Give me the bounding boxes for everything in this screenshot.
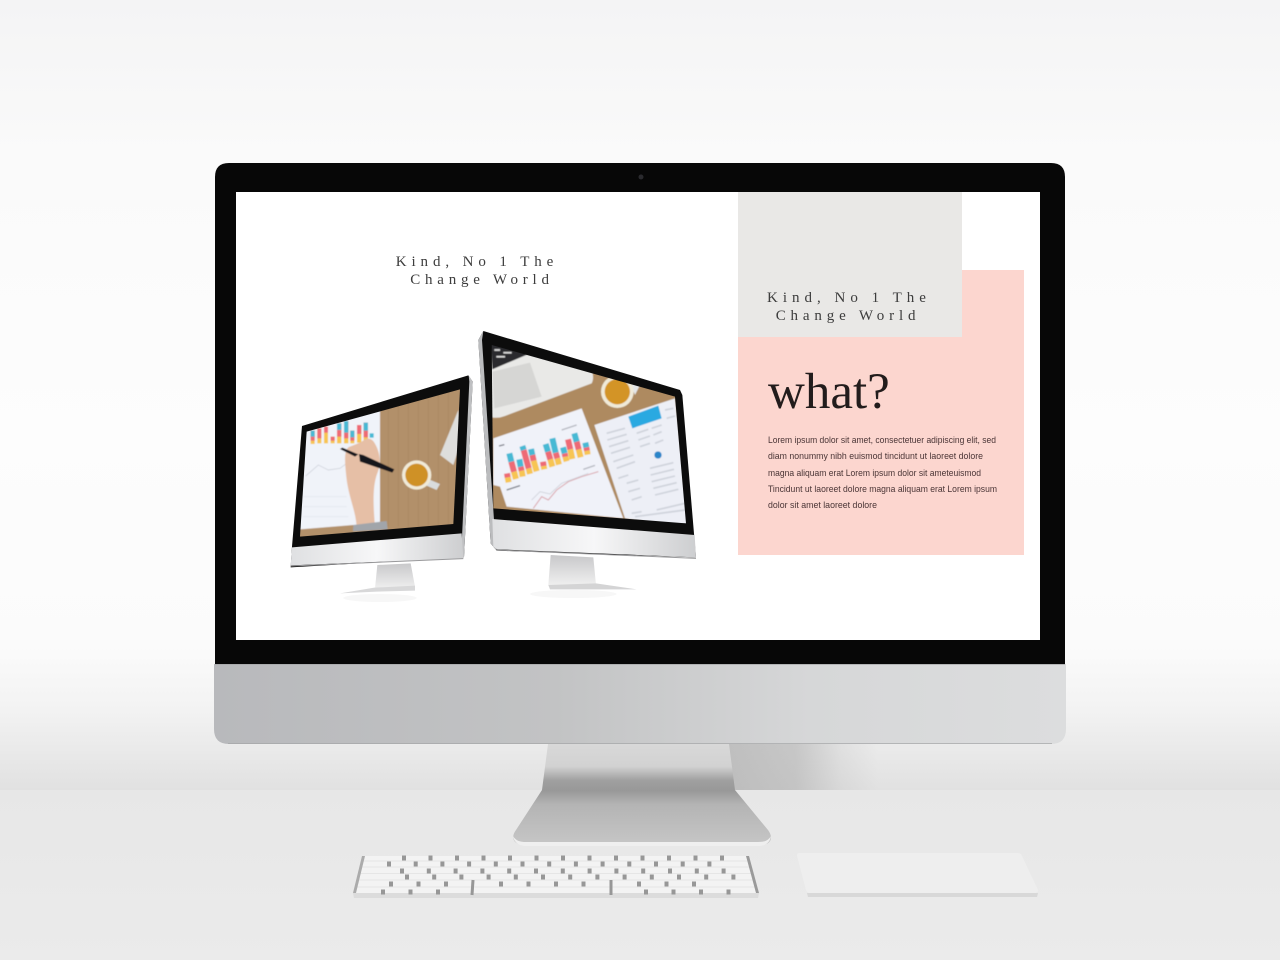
trackpad xyxy=(797,853,1038,897)
chart labels xyxy=(499,445,520,490)
heading: right slide title xyxy=(767,290,931,324)
coffee cup xyxy=(631,384,640,396)
body text: Lorem ipsum dolor sit amet, consectetuer adipiscing elit, sed xyxy=(768,435,996,446)
heading: right slide title: Change World xyxy=(776,308,920,324)
large monitor body xyxy=(478,331,696,557)
small monitor stand xyxy=(375,563,415,588)
webcam xyxy=(638,174,644,180)
line chart xyxy=(533,472,598,508)
panel: pink block xyxy=(738,270,1024,555)
body text: magna aliquam erat Lorem ipsum dolor sit ameteuismod xyxy=(768,468,981,479)
keyboard key marks xyxy=(381,858,736,895)
screen xyxy=(236,192,1040,640)
coffee cup xyxy=(402,460,440,490)
report text lines xyxy=(607,408,685,517)
monitor stand xyxy=(513,744,771,845)
body text: dolor sit amet laoreet dolore xyxy=(768,500,877,511)
laptop xyxy=(492,351,594,418)
monitor chin xyxy=(214,664,1066,744)
keyboard side edges xyxy=(353,856,365,893)
panel: gray block xyxy=(738,192,962,337)
chin edges xyxy=(215,664,1065,744)
large monitor screen photo xyxy=(492,345,686,524)
body text: Tincidunt ut laoreet dolore magna aliquam erat Lorem ipsum xyxy=(768,484,997,495)
monitor frame xyxy=(215,163,1065,664)
laptop keyboard xyxy=(492,345,528,370)
chart paper xyxy=(493,408,623,518)
small monitor body xyxy=(291,375,473,567)
body text xyxy=(768,435,997,511)
small monitor screen photo xyxy=(300,390,460,537)
key row gaps xyxy=(355,861,757,887)
hand and pen xyxy=(340,439,394,531)
heading: right slide title: Kind, No 1 The xyxy=(767,290,931,306)
large monitor chin xyxy=(492,519,696,557)
illustration: left small monitor xyxy=(290,375,473,594)
report header xyxy=(628,406,662,428)
illustration: right large monitor xyxy=(478,331,696,598)
heading: what?: what? xyxy=(768,364,890,420)
desktop computer xyxy=(214,163,1066,846)
report badge xyxy=(654,451,662,459)
heading: left slide title: Kind, No 1 The xyxy=(396,254,558,270)
large chart bars xyxy=(507,433,588,482)
heading: left slide title: Change World xyxy=(410,272,554,288)
stand base edge xyxy=(513,836,771,846)
small monitor reflection xyxy=(343,594,417,602)
report paper xyxy=(594,398,688,527)
keyboard xyxy=(353,856,759,898)
large monitor reflection xyxy=(530,590,617,598)
small chart bars xyxy=(311,421,374,444)
large monitor stand xyxy=(548,555,596,585)
small monitor chin xyxy=(291,533,463,565)
body text: diam nonummy nibh euismod tincidunt ut laoreet dolore xyxy=(768,451,983,462)
large monitor left edge xyxy=(478,331,497,551)
heading: left slide title xyxy=(396,254,558,288)
small monitor right edge xyxy=(461,375,473,558)
